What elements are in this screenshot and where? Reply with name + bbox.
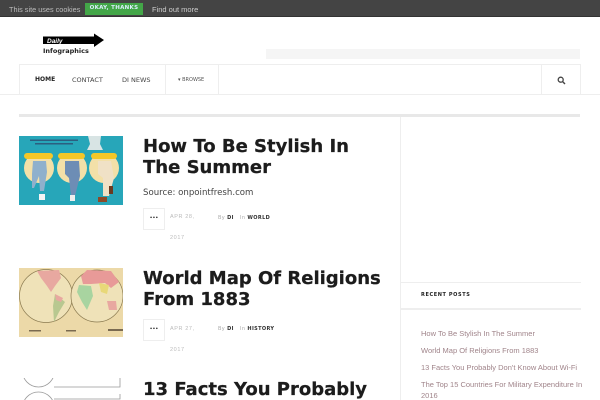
find out more link: Find out more	[152, 5, 198, 14]
recent posts heading: RECENT POSTS	[421, 292, 470, 298]
post 1 author: By DI	[218, 215, 234, 221]
post 1 date: 2017	[170, 235, 185, 241]
icon: search	[558, 76, 566, 84]
header rule	[0, 94, 600, 95]
recent post 2: World Map Of Religions From 1883	[421, 346, 538, 355]
post 2 date	[170, 326, 195, 353]
post 2 date: APR 27,	[170, 326, 195, 332]
search box	[541, 65, 581, 95]
post 1 title: How To Be Stylish In	[143, 136, 349, 157]
post 1 date: APR 28,	[170, 214, 195, 220]
post 1 category: In WORLD	[240, 215, 270, 221]
post 1 title: The Summer	[143, 157, 271, 178]
nav: browse: ▾ BROWSE	[178, 77, 204, 83]
nav divider	[165, 65, 219, 95]
logo: Daily	[47, 38, 63, 45]
post 3 thumbnail: facts	[24, 378, 120, 400]
header banner placeholder	[266, 49, 580, 59]
post 2 category: In HISTORY	[240, 326, 274, 332]
post 1 menu button	[143, 208, 165, 230]
logo: Infographics	[43, 47, 89, 55]
recent post 4: The Top 15 Countries For Military Expenditure In	[421, 380, 582, 389]
post 2 title: World Map Of Religions	[143, 268, 381, 289]
post 2 thumbnail: world map	[19, 268, 123, 337]
cookie bar	[0, 0, 600, 17]
post 3 title: 13 Facts You Probably	[143, 379, 367, 400]
logo	[43, 34, 104, 55]
nav: home: HOME	[35, 76, 55, 83]
post 2 menu button: •••	[150, 327, 158, 332]
recent post 3: 13 Facts You Probably Don't Know About Wi-Fi	[421, 363, 577, 372]
sidebar divider	[400, 117, 401, 400]
recent posts list	[421, 329, 582, 400]
post 2 author: By DI	[218, 326, 234, 332]
post 1 date	[170, 214, 195, 241]
post 1 title	[142, 136, 349, 178]
post 2 title: From 1883	[143, 289, 251, 310]
sidebar rule bottom	[401, 308, 581, 310]
post 1 thumbnail: summer jeans	[19, 136, 123, 205]
post 2 menu button	[143, 319, 165, 341]
recent post 4: 2016	[421, 391, 438, 400]
nav: di news: DI NEWS	[122, 76, 151, 84]
post 1 excerpt: Source: onpointfresh.com	[143, 188, 253, 198]
okay button	[85, 3, 143, 15]
post 2 date: 2017	[170, 347, 185, 353]
sidebar rule top	[401, 282, 581, 283]
navigation bar	[19, 64, 581, 95]
content rule	[19, 114, 580, 117]
nav: contact: CONTACT	[72, 76, 103, 84]
post 2 title	[143, 268, 381, 310]
recent post 4	[421, 380, 582, 400]
post 1 menu button: •••	[150, 216, 158, 221]
cookie message: This site uses cookies	[9, 5, 80, 14]
recent post 1: How To Be Stylish In The Summer	[421, 329, 535, 338]
okay button: OKAY, THANKS	[90, 5, 138, 11]
